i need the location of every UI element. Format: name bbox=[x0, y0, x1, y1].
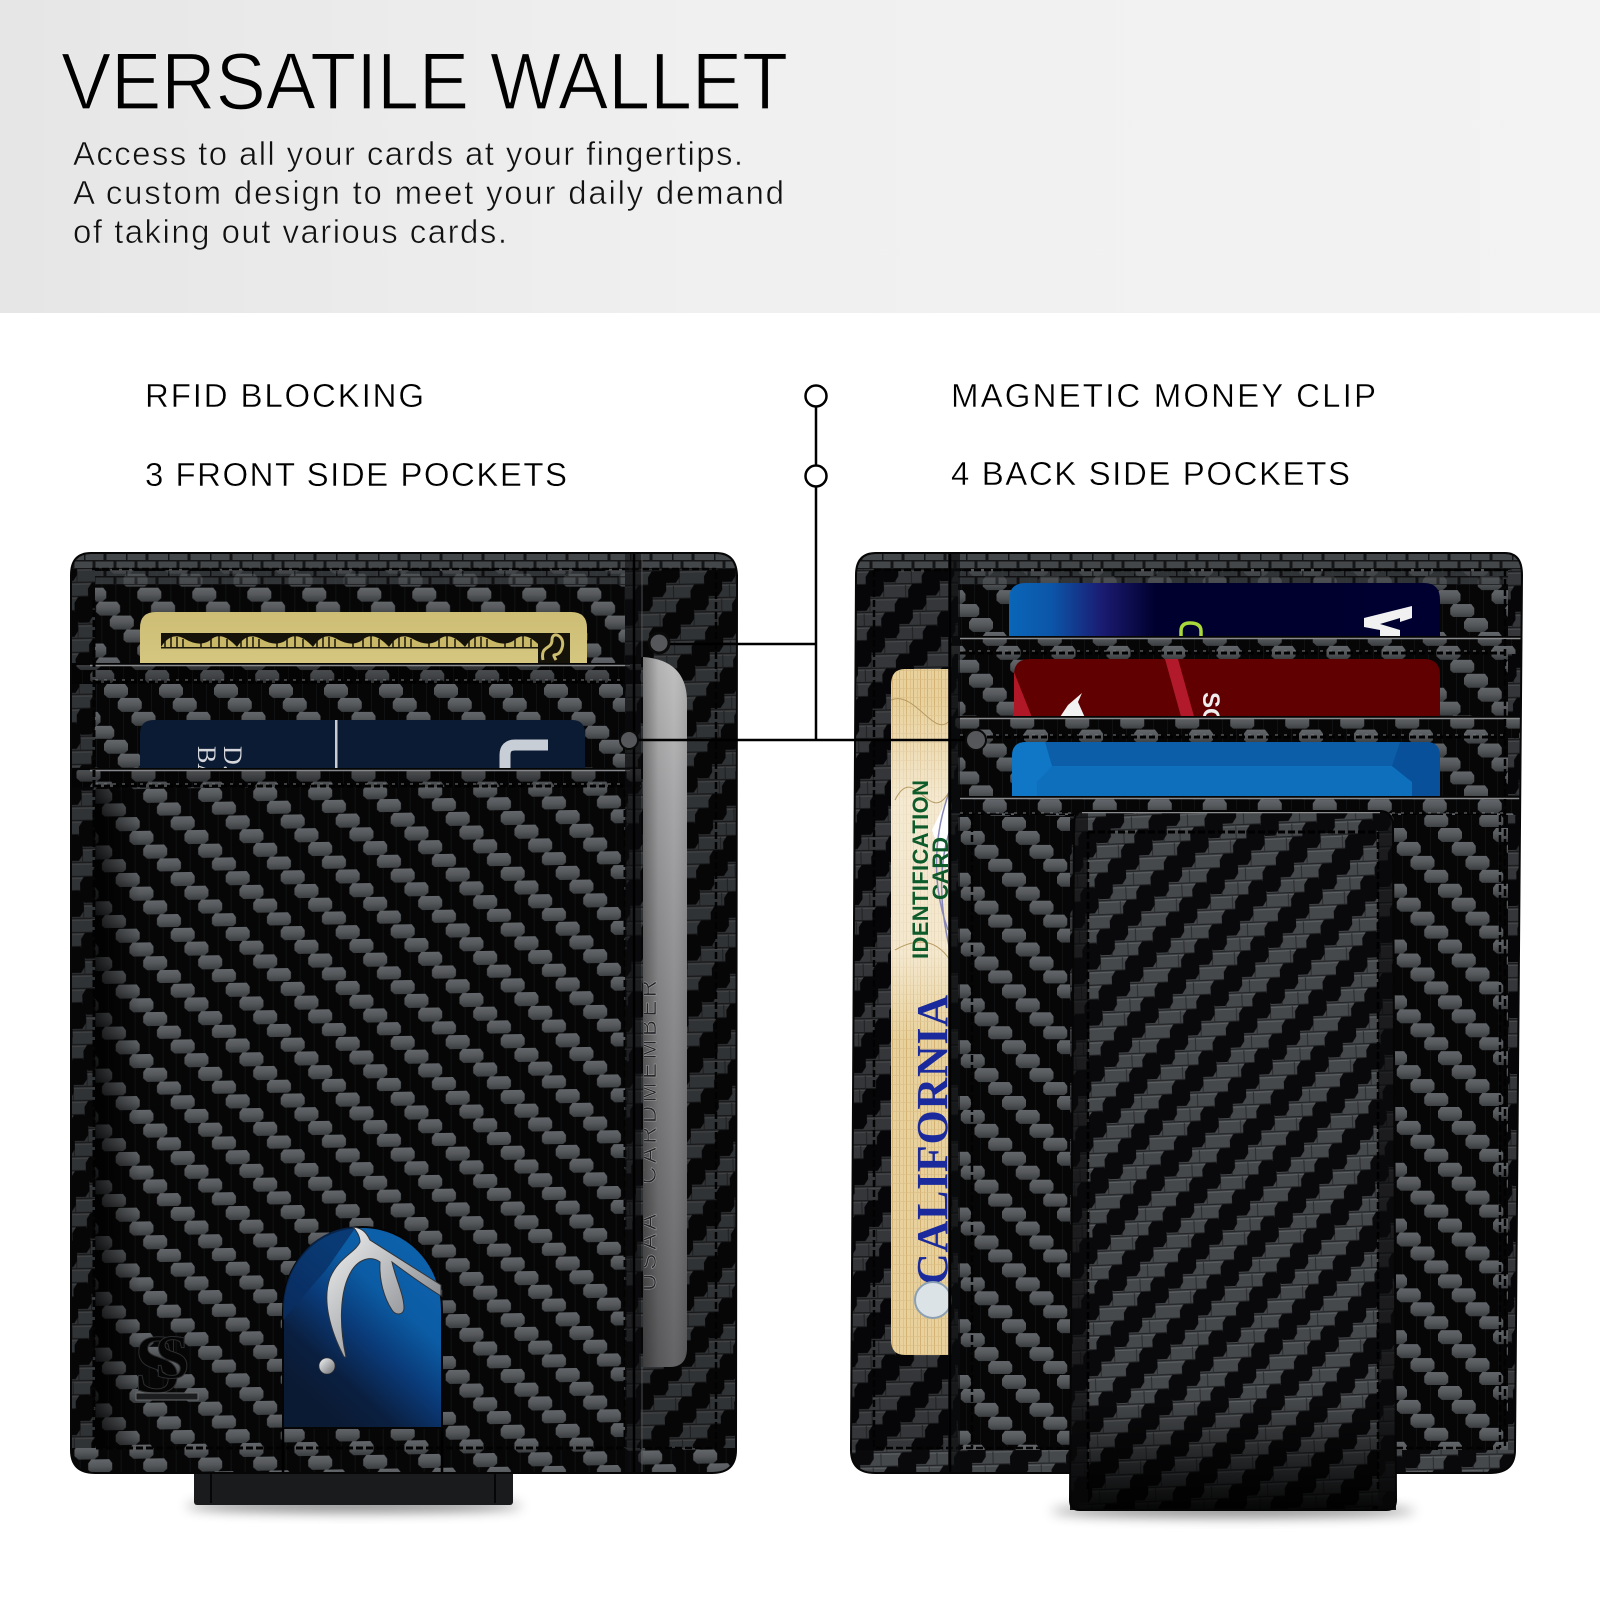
vertical seam bbox=[625, 553, 642, 1473]
header band bbox=[0, 0, 1600, 313]
left wallet: money clip tab bbox=[194, 1465, 513, 1505]
connector circle: upper bbox=[806, 386, 826, 406]
top pocket leather bbox=[95, 569, 625, 663]
upper blue card bbox=[1009, 583, 1440, 640]
description text bbox=[73, 135, 784, 250]
strip shading bbox=[851, 553, 1522, 1473]
right wallet shadow bbox=[1051, 1505, 1415, 1517]
right side pocket with carbon fibre pattern bbox=[1393, 815, 1508, 1455]
antler dot bbox=[319, 1358, 335, 1374]
gold card bbox=[140, 612, 587, 664]
bottom edge leather bbox=[71, 1448, 737, 1473]
strip shading bbox=[71, 553, 737, 1473]
lower pocket band bbox=[71, 769, 641, 787]
left wallet outline bbox=[71, 553, 737, 1473]
top edge bricks bbox=[851, 553, 1522, 585]
description text: of taking out various cards. bbox=[73, 213, 507, 250]
identification card: IDENTIFICATION bbox=[908, 780, 933, 959]
rivet: money clip left bbox=[649, 633, 669, 653]
left wallet shadow bbox=[186, 1500, 522, 1512]
stitching bbox=[874, 570, 1505, 1448]
right wallet: back side bbox=[851, 553, 1522, 1510]
red card: SO bbox=[1197, 692, 1224, 727]
silver card: CARDMEMBER bbox=[635, 980, 662, 1184]
right wallet outline bbox=[851, 553, 1522, 1473]
identification card: CARD bbox=[928, 837, 953, 900]
pocket bands bbox=[950, 637, 1522, 815]
right stitching bbox=[640, 572, 716, 1448]
feature label: 3 front side pockets: 3 FRONT SIDE POCKETS bbox=[145, 456, 567, 493]
feature label: 4 back side pockets: 4 BACK SIDE POCKETS bbox=[951, 455, 1350, 492]
rivet: pocket left bbox=[620, 731, 638, 749]
embossed logo: S bbox=[134, 1318, 181, 1411]
thumb slot bbox=[283, 1227, 442, 1473]
top pocket leather bbox=[958, 569, 1508, 796]
lower blue card bbox=[1012, 742, 1440, 800]
embossed logo: S bbox=[155, 1324, 189, 1392]
top edge bricks bbox=[71, 553, 737, 585]
feature label: RFID blocking: RFID BLOCKING bbox=[145, 377, 424, 414]
navy card bbox=[140, 720, 585, 768]
embossed logo bbox=[136, 1336, 198, 1400]
left wallet: front side bbox=[71, 553, 737, 1473]
feature label: magnetic money clip: MAGNETIC MONEY CLIP bbox=[951, 377, 1376, 414]
silver card bbox=[643, 657, 687, 1367]
side stitching bbox=[94, 600, 625, 1448]
navy card: BA bbox=[192, 746, 221, 782]
antler logo bbox=[327, 1227, 441, 1357]
vertical seam bbox=[948, 553, 960, 1473]
rivet: pocket right bbox=[966, 730, 986, 750]
identification card bbox=[891, 669, 957, 1355]
main pocket with carbon fibre pattern bbox=[95, 770, 625, 1450]
money clip bbox=[1070, 811, 1396, 1510]
connector circle: lower bbox=[806, 466, 826, 486]
bottom edge leather bbox=[851, 1450, 1522, 1473]
upper pocket band bbox=[71, 664, 641, 684]
description text: Access to all your cards at your fingertips. bbox=[73, 135, 743, 172]
connector lines bbox=[630, 407, 968, 740]
title: VERSATILE WALLET bbox=[61, 37, 788, 127]
identification card: CALIFORNIA bbox=[908, 995, 957, 1285]
main pocket left shading bbox=[95, 790, 135, 1448]
middle pocket leather bbox=[95, 684, 625, 768]
red card bbox=[1014, 659, 1440, 716]
left side pocket with carbon fibre pattern bbox=[958, 815, 1070, 1455]
navy card: D. bbox=[218, 746, 247, 771]
description text: A custom design to meet your daily demand bbox=[73, 174, 784, 211]
silver card: USAA bbox=[635, 1214, 662, 1291]
